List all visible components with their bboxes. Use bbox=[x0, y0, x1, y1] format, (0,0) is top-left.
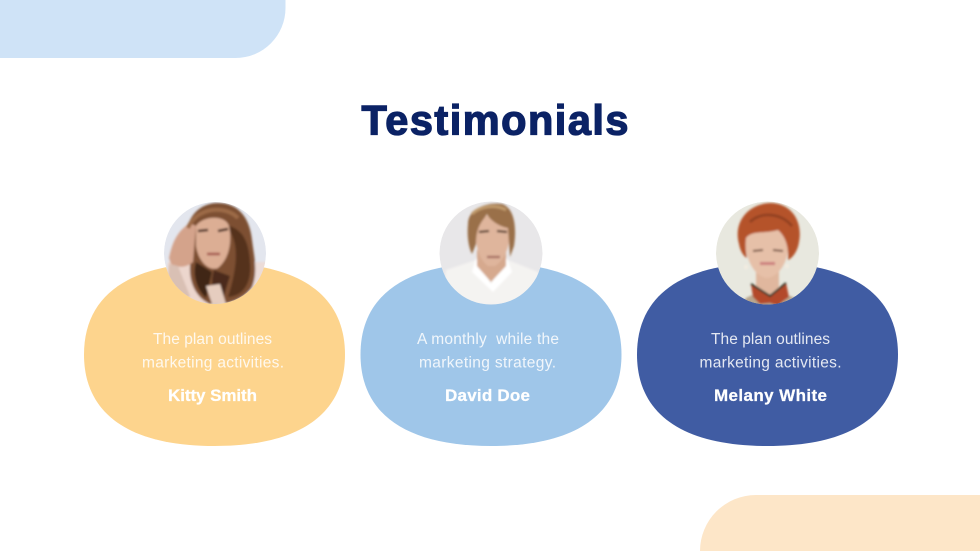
card: Melany White: marketing activities. bbox=[700, 354, 842, 372]
name: Kitty Smith bbox=[168, 386, 257, 405]
quote text: The plan outlines bbox=[153, 331, 272, 348]
portrait: Melany White bbox=[716, 202, 819, 310]
quote text: A monthly while the bbox=[417, 331, 559, 348]
name: David Doe bbox=[445, 386, 530, 405]
top-left decorative corner shape bbox=[0, 0, 286, 58]
card background: light blue bbox=[360, 263, 622, 446]
quote text: The plan outlines bbox=[711, 331, 830, 348]
card: Melany White bbox=[637, 202, 898, 446]
card: Kitty Smith bbox=[84, 202, 345, 446]
name: Melany White bbox=[714, 386, 827, 405]
portrait: David Doe bbox=[440, 202, 545, 305]
bottom-right decorative corner shape bbox=[700, 495, 980, 551]
card: Kitty Smith: marketing activities. bbox=[142, 354, 284, 372]
portrait: Kitty Smith bbox=[164, 202, 270, 304]
card: David Doe bbox=[360, 202, 622, 446]
card: David Doe: marketing strategy. bbox=[419, 354, 556, 372]
card background: dark blue bbox=[637, 263, 898, 446]
card background: yellow bbox=[84, 263, 345, 446]
title: Testimonials bbox=[362, 96, 628, 144]
